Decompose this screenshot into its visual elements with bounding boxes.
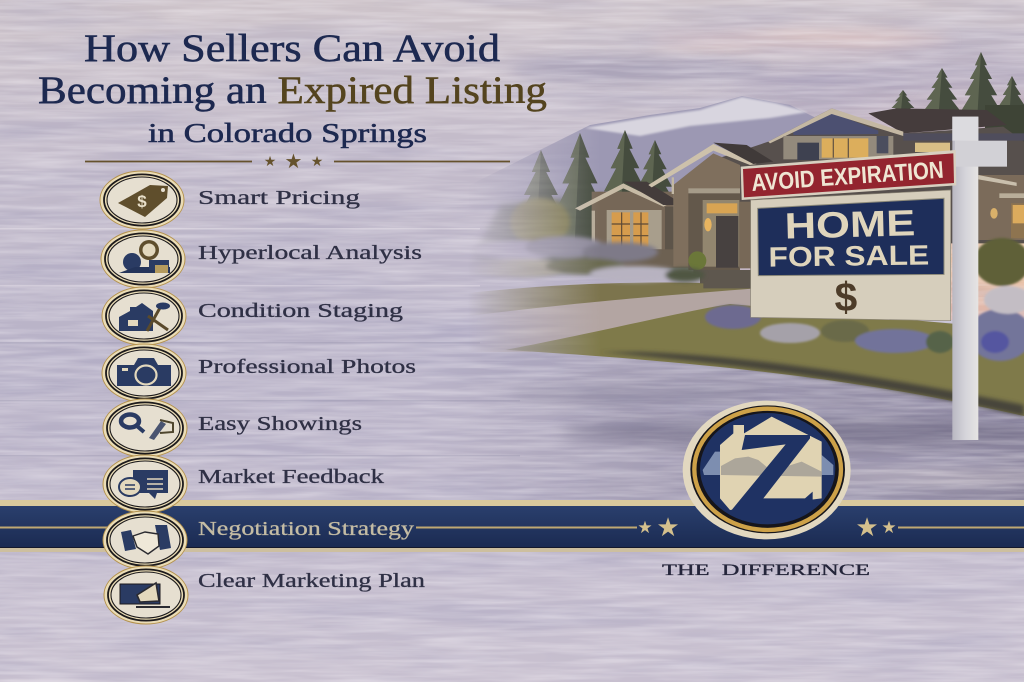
Z logo badge [683, 401, 851, 539]
icon: price tag [100, 171, 184, 229]
sign post [952, 117, 1007, 440]
for sale sign [741, 117, 1007, 440]
icon: speech bubbles [103, 455, 187, 513]
navy ribbon banner [0, 500, 1024, 552]
navy board: Home For Sale: HOME [784, 202, 916, 247]
logo Z letter [732, 435, 813, 510]
icon: price tag: $ [137, 192, 147, 211]
dollar sign: $ [835, 274, 858, 320]
entry wing and left wing [575, 143, 773, 288]
label: Easy Showings: Easy Showings [198, 413, 362, 435]
caption: The Difference: THE DIFFERENCE [662, 562, 870, 579]
label: Market Feedback: Market Feedback [198, 466, 384, 488]
title divider with stars: ★ [264, 155, 276, 170]
label: Condition Staging: Condition Staging [198, 300, 403, 322]
navy ribbon banner: ★ [656, 513, 680, 542]
lawn shadow [600, 352, 1024, 416]
label: Negotiation Strategy: Negotiation Strategy [198, 518, 414, 540]
navy ribbon banner: ★ [881, 518, 897, 537]
flower beds front [705, 238, 1024, 361]
label: Smart Pricing: Smart Pricing [198, 187, 360, 209]
lawn back [476, 282, 750, 315]
trees [510, 52, 1024, 250]
icon: marketing megaphone [104, 566, 188, 624]
icon: camera [102, 344, 186, 402]
label: Professional Photos: Professional Photos [198, 356, 416, 378]
icon: hyperlocal analysis [101, 230, 185, 288]
navy ribbon banner: ★ [637, 518, 653, 537]
title divider with stars: ★ [285, 151, 302, 173]
icon: house and tools [102, 287, 186, 345]
sign white panel [751, 190, 951, 321]
label: Hyperlocal Analysis: Hyperlocal Analysis [198, 242, 422, 264]
hazy tree mass [460, 190, 700, 275]
red board: Avoid Expiration: AVOID EXPIRATION [751, 157, 945, 197]
flower beds behind [470, 236, 705, 282]
title line 1: How Sellers Can Avoid [84, 27, 501, 70]
title [38, 27, 547, 148]
icon: handshake [103, 511, 187, 569]
logo mountain sides [703, 452, 833, 475]
logo house [720, 417, 822, 510]
title divider with stars [85, 151, 510, 173]
title line 3: in Colorado Springs [148, 118, 427, 148]
navy board: Home For Sale [758, 198, 944, 276]
title line 2: Becoming an Expired Listing [38, 69, 547, 112]
front lawn [505, 304, 1024, 416]
mountain [488, 96, 814, 204]
navy board: Home For Sale: FOR SALE [768, 239, 929, 273]
upper house [713, 108, 1024, 243]
driveway [481, 288, 750, 352]
title divider with stars: ★ [311, 155, 323, 170]
foreground road shading [510, 386, 1024, 486]
label: Clear Marketing Plan: Clear Marketing Plan [198, 570, 425, 592]
scene: house, mountain and landscape [476, 52, 1024, 419]
list of seller tips [100, 171, 425, 624]
icon: key and pen [103, 399, 187, 457]
logo mountains [721, 457, 822, 477]
navy ribbon banner: ★ [855, 513, 879, 542]
